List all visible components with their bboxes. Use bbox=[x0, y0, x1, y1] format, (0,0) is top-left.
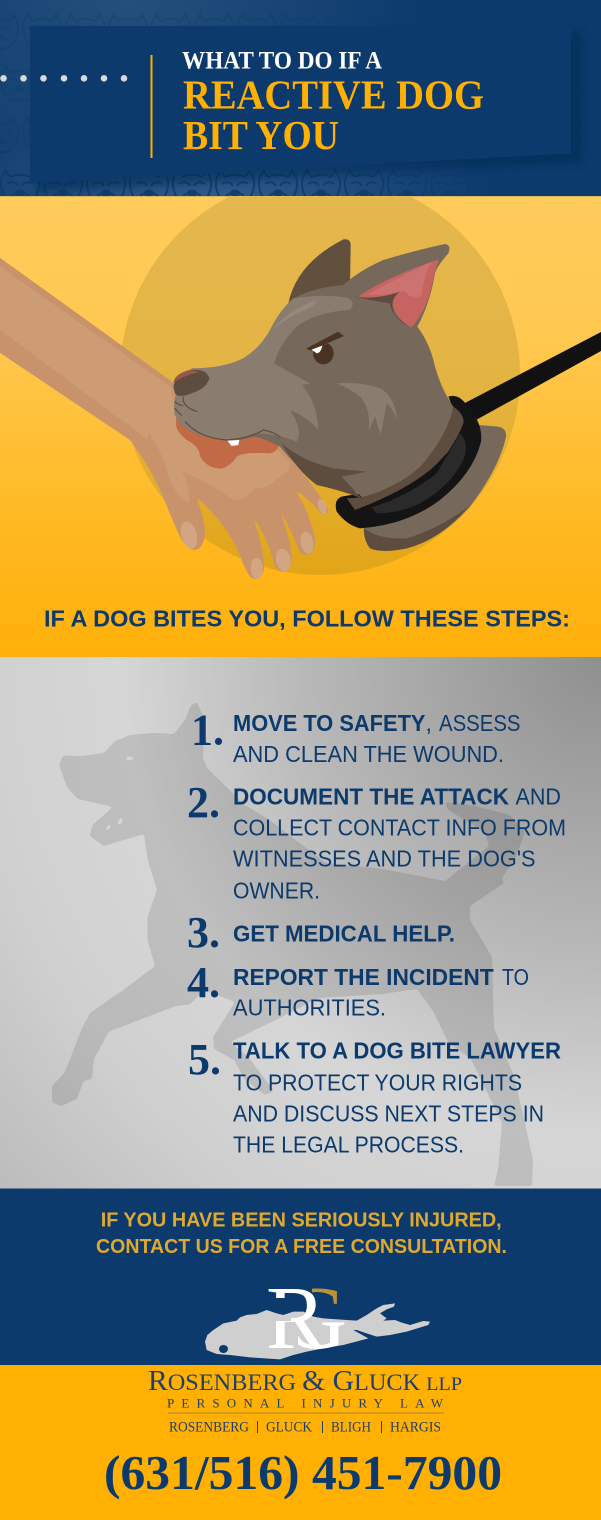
step 2: OWNER. bbox=[233, 878, 320, 904]
step 4: REPORT THE INCIDENT bbox=[233, 964, 494, 990]
step 1: MOVE TO SAFETY bbox=[233, 710, 426, 736]
logo: island monogram: R bbox=[266, 1269, 326, 1368]
step 5 bbox=[188, 1035, 561, 1158]
title bbox=[182, 48, 484, 158]
logo: island monogram: G bbox=[282, 1269, 347, 1368]
tagline: PERSONAL INJURY LAW bbox=[167, 1396, 444, 1411]
collar bbox=[336, 396, 481, 528]
neck band bbox=[347, 407, 464, 510]
mouth bbox=[175, 397, 281, 440]
panel: consultation footer bbox=[0, 1188, 601, 1368]
partner names: HARGIS bbox=[390, 1420, 441, 1436]
leash bbox=[463, 332, 601, 420]
step 4: AUTHORITIES. bbox=[233, 995, 386, 1021]
tooth bbox=[227, 440, 239, 446]
step 2: AND bbox=[516, 784, 561, 810]
ear bbox=[358, 259, 439, 327]
cheek tuft bbox=[337, 383, 397, 435]
step 3 bbox=[187, 908, 455, 957]
step 1: , bbox=[426, 710, 432, 736]
dotted line bbox=[0, 75, 127, 82]
header band bbox=[0, 0, 601, 197]
partner names: GLUCK bbox=[266, 1420, 312, 1436]
title: WHAT TO DO IF A bbox=[182, 48, 382, 74]
step 3: 3. bbox=[187, 908, 220, 957]
step 2 bbox=[187, 778, 566, 904]
partner names: ROSENBERG bbox=[169, 1420, 249, 1436]
partner names: BLIGH bbox=[331, 1420, 371, 1436]
step 1: AND CLEAN THE WOUND. bbox=[233, 741, 504, 767]
title: BIT YOU bbox=[183, 112, 339, 158]
step 1 bbox=[191, 706, 520, 767]
partner names bbox=[169, 1420, 441, 1436]
neck fold bbox=[363, 424, 506, 551]
wound bbox=[176, 416, 279, 469]
fingernails bbox=[178, 498, 329, 579]
title: REACTIVE DOG bbox=[183, 72, 484, 118]
dog face pattern bbox=[0, 0, 601, 197]
panel: steps bbox=[0, 657, 601, 1189]
step 2: 2. bbox=[187, 778, 220, 827]
dog silhouette bbox=[52, 702, 533, 1186]
back ear bbox=[288, 239, 351, 303]
phone number: (631/516) 451-7900 bbox=[104, 1445, 502, 1500]
eye bbox=[306, 332, 344, 364]
yellow backdrop circle bbox=[120, 175, 520, 575]
step 5: 5. bbox=[188, 1035, 221, 1084]
logo: island monogram bbox=[205, 1288, 430, 1360]
title banner bbox=[30, 26, 571, 183]
firm name: ROSENBERG & GLUCK LLP bbox=[148, 1366, 462, 1397]
nose bbox=[173, 370, 209, 396]
step 2: COLLECT CONTACT INFO FROM bbox=[233, 815, 566, 841]
step 4 bbox=[187, 958, 529, 1021]
steps lead-in heading: IF A DOG BITES YOU, FOLLOW THESE STEPS: bbox=[44, 606, 570, 632]
step 4: 4. bbox=[187, 958, 220, 1007]
muzzle and forehead fur bbox=[174, 296, 353, 442]
step 3: GET MEDICAL HELP. bbox=[233, 920, 455, 946]
step 5: TO PROTECT YOUR RIGHTS bbox=[233, 1069, 522, 1095]
step 5: AND DISCUSS NEXT STEPS IN bbox=[233, 1100, 544, 1126]
step 5: TALK TO A DOG BITE LAWYER bbox=[233, 1038, 561, 1064]
call to action: IF YOU HAVE BEEN SERIOUSLY INJURED, bbox=[101, 1209, 502, 1232]
step 1: ASSESS bbox=[439, 710, 520, 736]
step 2: WITNESSES AND THE DOG'S bbox=[233, 846, 536, 872]
dog head bbox=[173, 239, 506, 551]
call to action: CONTACT US FOR A FREE CONSULTATION. bbox=[96, 1235, 507, 1258]
head bbox=[174, 244, 453, 497]
under jaw shadow bbox=[282, 443, 367, 498]
step 5: THE LEGAL PROCESS. bbox=[233, 1132, 464, 1158]
panel: bite illustration bbox=[0, 175, 601, 657]
step 2: DOCUMENT THE ATTACK bbox=[233, 784, 509, 810]
call to action bbox=[96, 1209, 507, 1258]
step 1: 1. bbox=[191, 706, 224, 754]
panel: firm contact bbox=[0, 1365, 601, 1520]
arm and hand bbox=[0, 255, 329, 579]
step 4: TO bbox=[502, 964, 529, 990]
